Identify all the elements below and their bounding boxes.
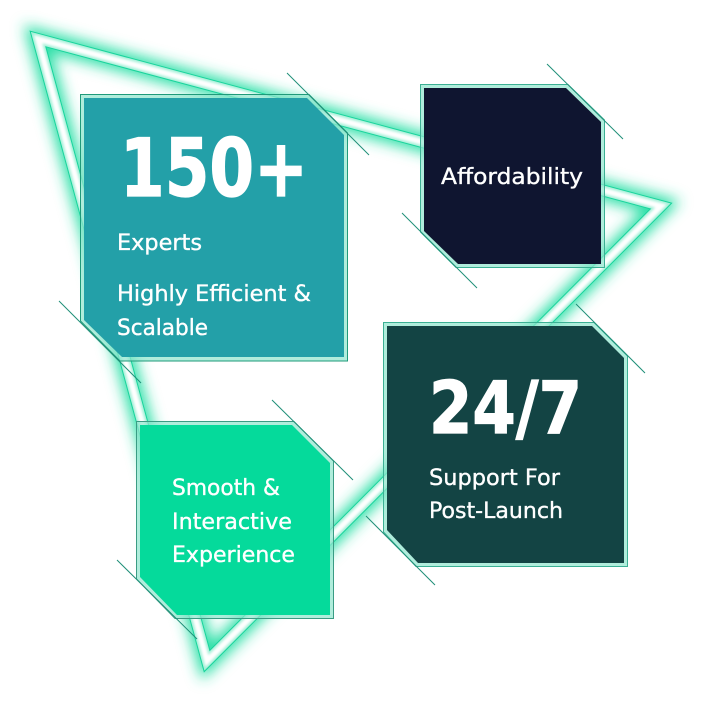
big number 150+: 150+ xyxy=(120,122,308,215)
label: Support For Post-Launch xyxy=(429,466,563,524)
label: Smooth & Interactive Experience: Interactive xyxy=(172,510,292,535)
card: 150+ experts xyxy=(59,73,369,383)
accent line: bottom left xyxy=(59,301,141,383)
label: Highly Efficient & Scalable xyxy=(117,282,311,341)
card: 24/7 support xyxy=(366,304,645,585)
label: Affordability: Affordability xyxy=(441,165,583,190)
label: Highly Efficient & Scalable: Scalable xyxy=(117,316,208,341)
accent line: bottom left xyxy=(117,560,197,639)
card: smooth experience xyxy=(117,400,353,639)
neon triangle xyxy=(38,39,661,661)
accent line: top right xyxy=(576,304,645,373)
label: Highly Efficient & Scalable: Highly Efficient & xyxy=(117,282,311,307)
label: Support For Post-Launch: Support For xyxy=(429,466,561,491)
big number 24/7: 24/7 xyxy=(429,366,582,450)
accent line: bottom left xyxy=(402,213,477,288)
accent line: top right xyxy=(547,64,623,139)
label: Experts: Experts xyxy=(117,231,202,256)
accent line: top right xyxy=(272,400,353,480)
accent line: top right xyxy=(287,73,369,155)
accent line: bottom left xyxy=(366,516,435,585)
card: affordability xyxy=(402,64,623,288)
label: Smooth & Interactive Experience xyxy=(172,476,295,568)
label: Support For Post-Launch: Post-Launch xyxy=(429,499,563,524)
label: Smooth & Interactive Experience: Experience xyxy=(172,543,295,568)
label: Smooth & Interactive Experience: Smooth & xyxy=(172,476,280,501)
